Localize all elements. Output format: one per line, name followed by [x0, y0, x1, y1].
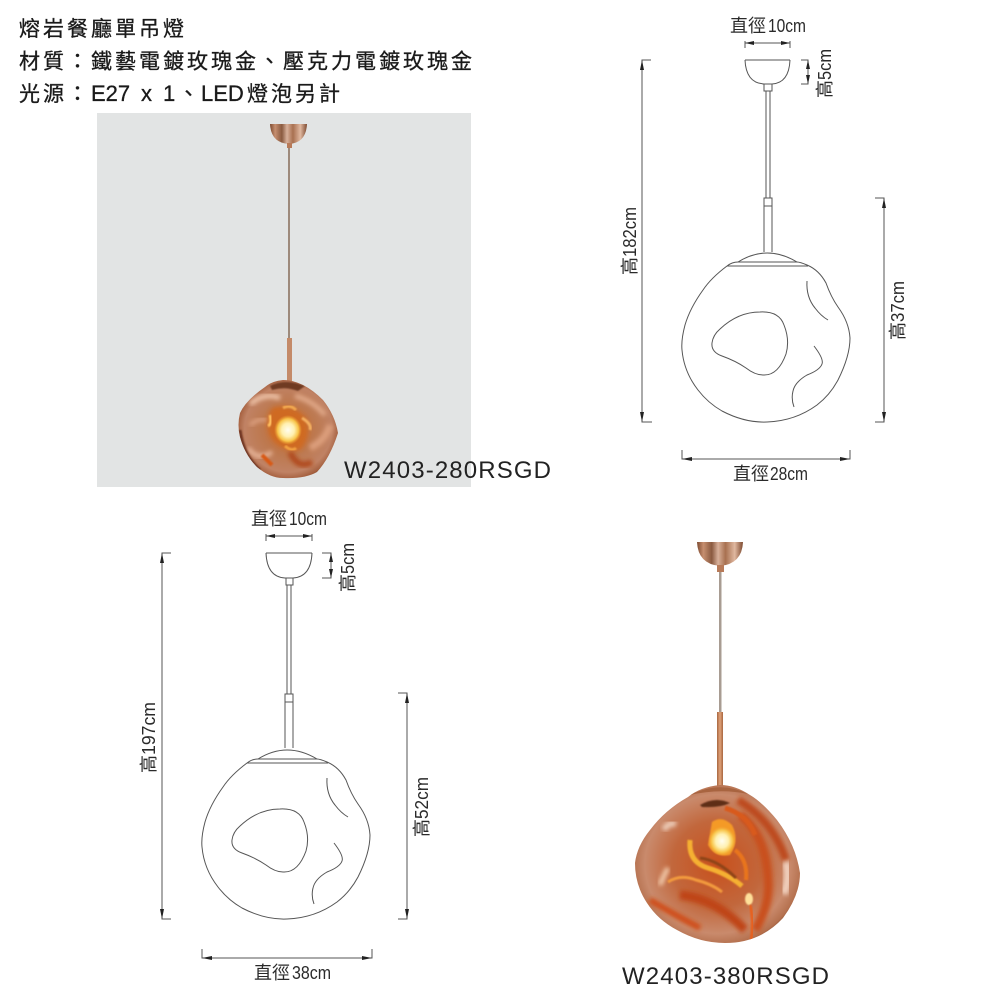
line drawing: 28cm lamp with dimensions	[620, 16, 908, 484]
dimension: top diameter 10cm: 直徑	[730, 16, 766, 36]
dimension: top diameter 10cm	[251, 509, 327, 541]
dimension: globe height 52cm: 52cm	[412, 777, 432, 819]
dimension: globe diameter 28cm	[682, 450, 850, 484]
dimension bracket: canopy height	[801, 60, 810, 84]
dimension: globe height 37cm	[888, 281, 908, 340]
dimension: globe diameter 38cm: 直徑	[254, 963, 290, 983]
bulb	[274, 415, 302, 445]
panel: grey photo of 28cm lamp	[97, 113, 471, 487]
globe	[635, 785, 800, 945]
dimension: canopy height 5cm	[815, 49, 835, 98]
cord	[288, 148, 290, 340]
copper sleeve	[717, 712, 723, 786]
photo: 38cm copper lamp	[635, 542, 800, 945]
label: model W2403-280RSGD: W2403-280RSGD	[344, 457, 551, 484]
dimension: globe diameter 28cm: 28cm	[770, 464, 808, 484]
ceiling canopy	[697, 542, 743, 566]
copper sleeve	[287, 338, 292, 382]
drawing: canopy and rods	[745, 60, 790, 252]
drawing: canopy and rods	[266, 553, 312, 748]
material line: 材質：鐵藝電鍍玫瑰金、壓克力電鍍玫瑰金	[19, 50, 475, 74]
ceiling canopy	[270, 124, 307, 144]
dimension: top diameter 10cm: 直徑	[251, 509, 287, 529]
heading: product title and specs	[19, 18, 475, 106]
canopy stem	[287, 143, 292, 148]
light source line: 燈泡另計	[247, 83, 343, 106]
dimension: total height 197cm: 高	[139, 755, 159, 773]
dimension: canopy height 5cm: 5cm	[338, 543, 358, 574]
dimension: top diameter 10cm: 10cm	[768, 16, 806, 36]
drawing: globe outline	[202, 750, 370, 919]
dimension: total height 197cm: 197cm	[139, 702, 159, 755]
light source line: E27	[91, 81, 130, 106]
dimension bracket: canopy height	[322, 553, 333, 578]
dimension: globe diameter 38cm	[202, 949, 372, 983]
drawing: globe outline	[682, 253, 850, 422]
dimension: canopy height 5cm	[338, 543, 358, 592]
globe	[238, 380, 338, 478]
light source line: x	[141, 81, 152, 106]
dimension: globe height 52cm: 高	[412, 819, 432, 837]
dimension: canopy height 5cm: 5cm	[815, 49, 835, 80]
cord	[719, 572, 722, 713]
bulb	[708, 826, 736, 856]
dimension line: total height	[640, 60, 652, 422]
label: model W2403-380RSGD: W2403-380RSGD	[622, 963, 829, 990]
dimension: globe diameter 38cm: 38cm	[292, 963, 331, 983]
title: 熔岩餐廳單吊燈	[19, 18, 187, 41]
dimension line: globe height	[398, 693, 409, 919]
dimension line: globe height	[875, 198, 886, 422]
dimension: canopy height 5cm: 高	[338, 574, 358, 592]
light source line: 1	[163, 81, 175, 106]
dimension: canopy height 5cm: 高	[815, 80, 835, 98]
dimension line: total height	[160, 553, 171, 919]
canopy stem	[717, 565, 724, 572]
dimension: total height 182cm: 高	[620, 257, 640, 275]
dimension: top diameter 10cm: 10cm	[289, 509, 327, 529]
dimension: total height 182cm	[620, 207, 640, 275]
light source line: 、	[178, 83, 202, 106]
dimension: top diameter 10cm	[730, 16, 806, 48]
dimension: globe diameter 28cm: 直徑	[733, 464, 769, 484]
light source line: 光源：	[19, 83, 91, 106]
dimension: total height 182cm: 182cm	[620, 207, 640, 257]
line drawing: 38cm lamp with dimensions	[139, 509, 432, 983]
dimension: globe height 37cm: 37cm	[888, 281, 908, 322]
light source line: LED	[201, 81, 244, 106]
dimension: globe height 37cm: 高	[888, 322, 908, 340]
dimension: globe height 52cm	[412, 777, 432, 837]
